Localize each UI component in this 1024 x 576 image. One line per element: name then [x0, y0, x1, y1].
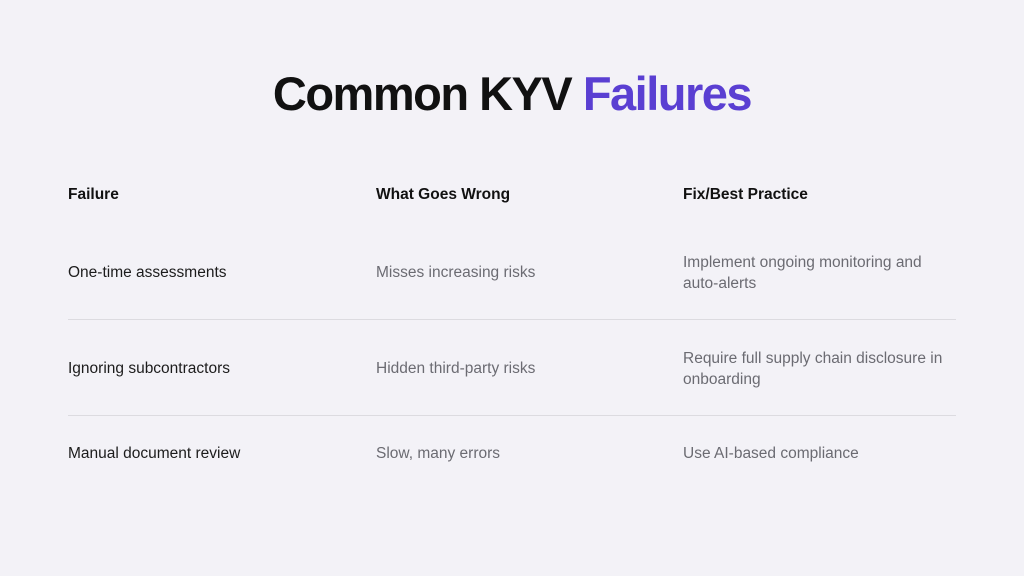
- row 2 failure: Ignoring subcontractors: [68, 360, 230, 377]
- row 1 failure: One-time assessments: [68, 264, 226, 281]
- row 3 failure: Manual document review: [68, 445, 240, 462]
- row 3 problem: Slow, many errors: [376, 445, 500, 462]
- row 2 fix: onboarding: [683, 371, 761, 388]
- row 2 fix: [683, 350, 942, 388]
- row 3 fix: Use AI-based compliance: [683, 445, 859, 462]
- row 2 fix: Require full supply chain disclosure in: [683, 350, 942, 367]
- header: What Goes Wrong: What Goes Wrong: [376, 186, 510, 203]
- row 2 problem: Hidden third-party risks: [376, 360, 535, 377]
- row 1 fix: auto-alerts: [683, 275, 756, 292]
- header: Failure: Failure: [68, 186, 119, 203]
- row 1 fix: Implement ongoing monitoring and: [683, 254, 922, 271]
- title: Common KYV Failures: [273, 67, 751, 120]
- header: Fix/Best Practice: Fix/Best Practice: [683, 186, 808, 203]
- row 1 problem: Misses increasing risks: [376, 264, 535, 281]
- row 1 fix: [683, 254, 922, 292]
